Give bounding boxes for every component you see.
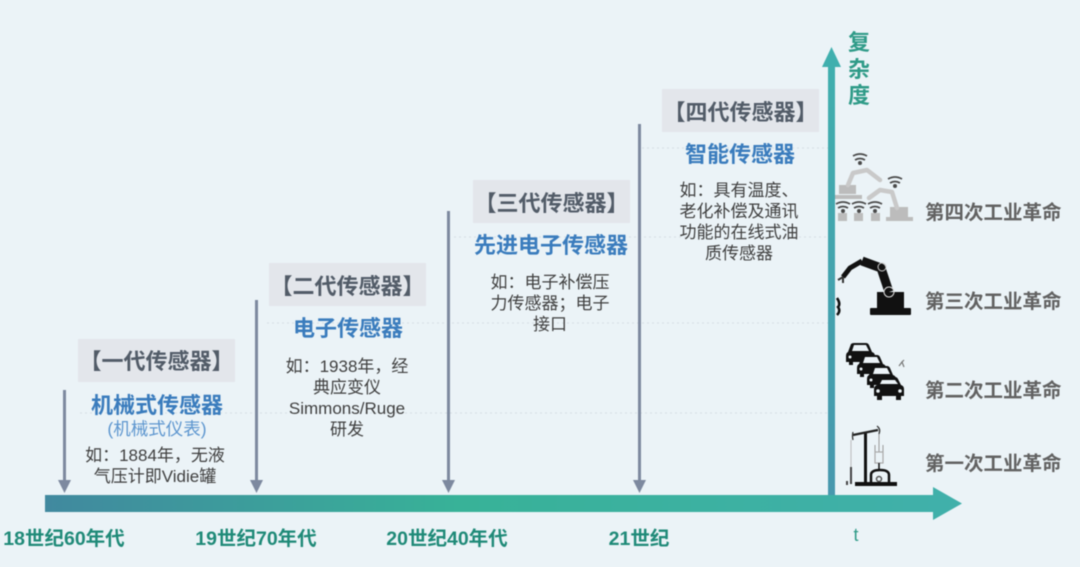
heading: fourth generation — [662, 89, 819, 132]
era label: 21st century: 21世纪 — [609, 528, 669, 550]
description: third generation: 力传感器；电子 — [490, 294, 610, 313]
era label: 19th century 70s: 19世纪70年代 — [195, 528, 317, 550]
y-axis label: 度 — [848, 83, 870, 108]
icon: first industrial revolution oil pump — [846, 426, 897, 486]
description: third generation: 如：电子补偿压 — [490, 273, 610, 292]
vertical axis arrow — [822, 47, 841, 496]
era label: 20th century 40s: 20世纪40年代 — [386, 528, 508, 550]
description: third generation: 接口 — [533, 315, 567, 334]
milestone arrow: 18th century — [58, 390, 71, 493]
milestone arrow: 19th century — [250, 300, 263, 493]
heading: fourth generation: 【四代传感器】 — [663, 100, 818, 125]
icon: second industrial revolution cars — [846, 343, 904, 400]
description: second generation: 研发 — [330, 420, 364, 439]
description: first generation: 如：1884年，无液 — [85, 446, 225, 465]
heading: first generation: 【一代传感器】 — [79, 349, 234, 374]
y-axis label: 复 — [848, 30, 870, 55]
heading: first generation — [78, 339, 235, 382]
description: first generation — [85, 446, 225, 486]
name: electronic sensors: 电子传感器 — [293, 316, 403, 341]
description: second generation: 如：1938年，经 — [286, 357, 408, 376]
description: fourth generation: 质传感器 — [705, 244, 773, 263]
label: fourth industrial revolution: 第四次工业革命 — [925, 202, 1062, 224]
description: fourth generation: 如：具有温度、 — [680, 181, 798, 200]
description: second generation — [286, 356, 408, 439]
era label: 18th century 60s: 18世纪60年代 — [3, 528, 125, 550]
description: second generation: Simmons/Ruge — [289, 399, 405, 418]
label: second industrial revolution: 第二次工业革命 — [925, 380, 1062, 402]
description: fourth generation — [680, 180, 799, 263]
horizontal timeline arrow — [45, 487, 962, 520]
heading: second generation — [269, 263, 426, 306]
heading: second generation: 【二代传感器】 — [270, 274, 424, 299]
milestone arrow: 21st century — [633, 124, 646, 493]
heading: third generation — [473, 180, 630, 223]
description: fourth generation: 老化补偿及通讯 — [680, 202, 798, 221]
name: smart sensors: 智能传感器 — [685, 142, 795, 167]
description: second generation: 典应变仪 — [313, 378, 381, 397]
y-axis label — [848, 30, 870, 108]
description: fourth generation: 功能的在线式油 — [680, 223, 798, 242]
milestone arrow: 20th century — [442, 211, 455, 493]
icon: third industrial revolution robot arm — [837, 261, 911, 315]
y-axis label: 杂 — [848, 56, 870, 82]
heading: third generation: 【三代传感器】 — [474, 191, 628, 216]
time axis label: t — [853, 525, 858, 545]
name: advanced electronic sensors: 先进电子传感器 — [474, 233, 628, 258]
label: first industrial revolution: 第一次工业革命 — [925, 453, 1062, 475]
subname: mechanical instruments: (机械式仪表) — [107, 419, 207, 439]
description: third generation — [490, 272, 610, 334]
icon: fourth industrial revolution robots and wifi — [835, 154, 913, 221]
label: third industrial revolution: 第三次工业革命 — [925, 291, 1062, 313]
description: first generation: 气压计即Vidie罐 — [94, 467, 216, 486]
name: mechanical sensors: 机械式传感器 — [91, 393, 223, 418]
